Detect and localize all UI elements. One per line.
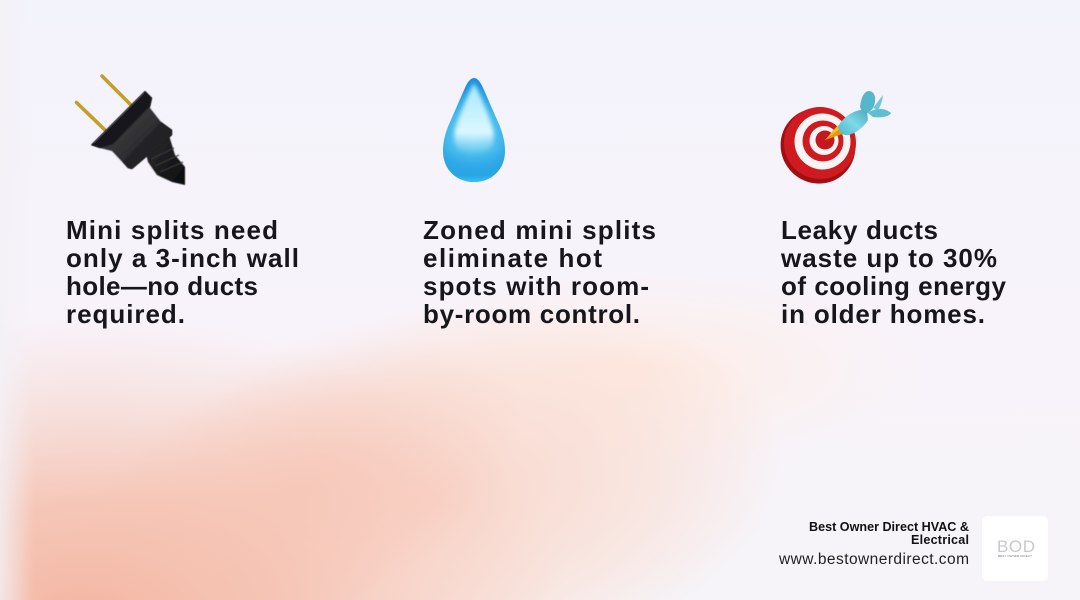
logo mark: BOD bbox=[997, 537, 1035, 556]
heading: column 3 bbox=[780, 215, 1007, 329]
heading: column 3: in older homes. bbox=[781, 299, 985, 329]
logo tile bbox=[982, 516, 1048, 581]
brand name: Best Owner Direct HVAC & bbox=[809, 520, 969, 534]
heading: column 1: only a 3-inch wall bbox=[66, 243, 299, 273]
heading: column 1: required. bbox=[66, 299, 185, 329]
heading: column 3: of cooling energy bbox=[781, 271, 1007, 301]
heading: column 1: Mini splits need bbox=[66, 215, 278, 245]
heading: column 2 bbox=[423, 215, 656, 329]
heading: column 2: eliminate hot bbox=[423, 243, 602, 273]
icon: electric plug bbox=[74, 74, 186, 186]
brand name: Electrical bbox=[911, 533, 969, 547]
heading: column 3: waste up to 30% bbox=[780, 243, 997, 273]
heading: column 2: spots with room- bbox=[423, 271, 649, 301]
heading: column 2: by-room control. bbox=[423, 299, 640, 329]
heading: column 2: Zoned mini splits bbox=[423, 215, 656, 245]
heading: column 3: Leaky ducts bbox=[781, 215, 938, 245]
heading: column 1 bbox=[66, 215, 299, 329]
brand name bbox=[809, 520, 969, 547]
heading: column 1: hole—no ducts bbox=[66, 271, 258, 301]
icon: water drop bbox=[443, 78, 505, 182]
website url: www.bestownerdirect.com bbox=[778, 551, 969, 568]
icon: dart target bbox=[780, 91, 891, 184]
logo mark: BEST OWNER DIRECT bbox=[998, 554, 1032, 558]
